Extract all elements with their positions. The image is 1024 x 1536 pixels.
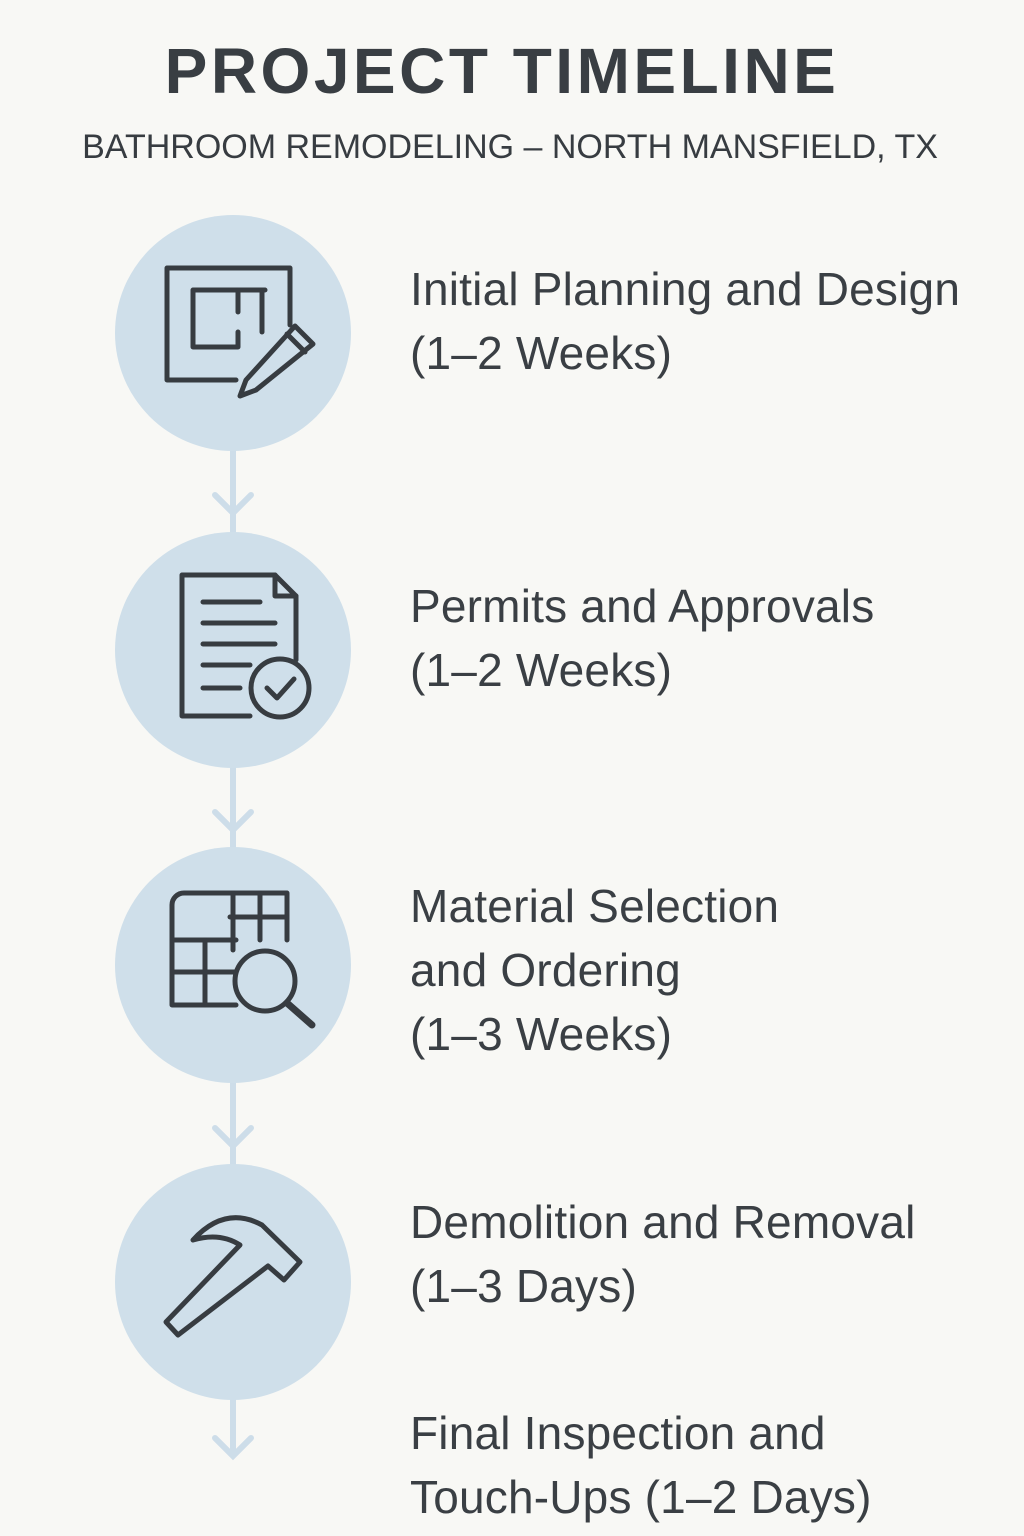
step 5 text [410, 1407, 872, 1523]
step 4 text: Demolition and Removal [410, 1196, 916, 1248]
icon: floor plan [167, 268, 313, 396]
step 1 text [410, 263, 960, 379]
subtitle: BATHROOM REMODELING – NORTH MANSFIELD, TX [82, 128, 938, 166]
arrows [215, 450, 251, 1456]
step 1 text: Initial Planning and Design [410, 263, 960, 315]
title: PROJECT TIMELINE [165, 35, 839, 107]
icon: document check [182, 575, 309, 717]
icon: hammer [166, 1218, 300, 1335]
step 5 text: Touch-Ups (1–2 Days) [410, 1471, 872, 1523]
step 3 text: (1–3 Weeks) [410, 1008, 672, 1060]
step 4 text [410, 1196, 916, 1312]
step 2 text: Permits and Approvals [410, 580, 874, 632]
step 3 text: Material Selection [410, 880, 779, 932]
circles [115, 215, 351, 1400]
step 2 text: (1–2 Weeks) [410, 644, 672, 696]
step 3 text [410, 880, 779, 1060]
step 3 text: and Ordering [410, 944, 681, 996]
step 1 text: (1–2 Weeks) [410, 327, 672, 379]
step 5 text: Final Inspection and [410, 1407, 826, 1459]
step 2 text [410, 580, 874, 696]
icon: tile grid with magnifier [172, 893, 312, 1025]
step 4 text: (1–3 Days) [410, 1260, 637, 1312]
